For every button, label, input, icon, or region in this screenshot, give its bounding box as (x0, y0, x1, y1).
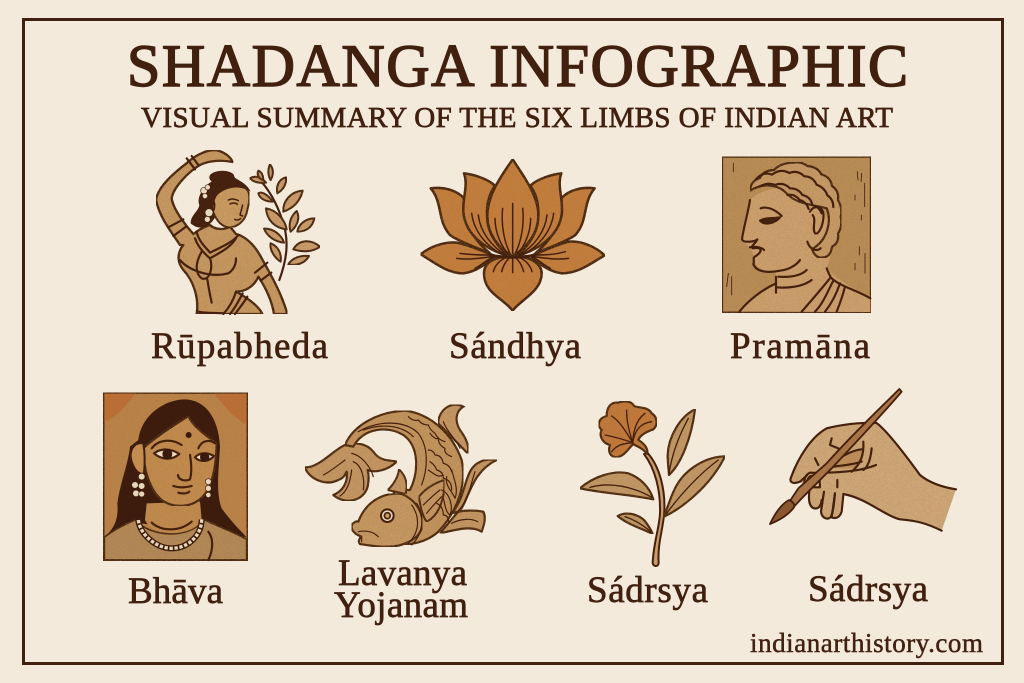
label line: Lavanya: Lavanya (338, 553, 467, 594)
dancer hair flowers (201, 185, 213, 222)
label: Sádrsya (hand): Sádrsya (808, 569, 928, 610)
portrait hair (750, 162, 841, 258)
flower lines and leaf veins (590, 410, 718, 533)
title: SHADANGA INFOGRAPHIC (127, 33, 908, 99)
hand shape (790, 423, 956, 531)
label: Sádrsya (flower): Sádrsya (587, 570, 708, 611)
fish top fin (438, 405, 468, 453)
woman garment (104, 520, 247, 560)
fish eye (381, 509, 394, 522)
fish pectoral fin (419, 480, 444, 522)
fish body (345, 411, 463, 545)
fish scales and lines (323, 417, 478, 545)
finger shading (832, 449, 862, 468)
fish tail fin (305, 443, 397, 501)
woman frame (103, 393, 248, 561)
subtitle: VISUAL SUMMARY OF THE SIX LIMBS OF INDIAN ART (141, 102, 893, 134)
frame corner shading (104, 394, 135, 422)
woman neck (145, 502, 202, 533)
icon: dancer with branch (156, 150, 320, 314)
branch leaves (250, 164, 320, 265)
label line: Yojanam: Yojanam (334, 585, 468, 626)
label: Pramāna: Pramāna (730, 326, 870, 367)
woman features (152, 441, 215, 560)
bindi (186, 432, 192, 438)
label: Bhāva: Bhāva (128, 571, 223, 612)
brush tip (770, 500, 794, 524)
woman necklace beads (138, 519, 202, 548)
label: Lavanya Yojanam (334, 553, 468, 626)
fish head (352, 494, 422, 547)
woman irises (162, 449, 209, 462)
dancer head (211, 183, 249, 227)
dancer necklaces (195, 232, 238, 303)
portrait lines (739, 171, 870, 312)
woman face (143, 416, 217, 506)
label: Rūpabheda: Rūpabheda (151, 326, 328, 367)
brush handle (788, 389, 902, 507)
sprig stem (644, 453, 664, 566)
dancer bangles and waist (168, 156, 271, 314)
fish dorsal fin on head (388, 469, 407, 494)
portrait bust (739, 188, 870, 312)
portrait frame (722, 157, 871, 313)
portrait background scratches (727, 163, 865, 295)
website credit: indianarthistory.com (750, 628, 983, 658)
woman ear (131, 443, 145, 474)
woman earrings (132, 473, 211, 498)
hand outline and finger lines (790, 423, 956, 531)
lotus veins (457, 203, 569, 273)
dancer body (156, 150, 287, 314)
branch stem (258, 178, 287, 280)
woman necklace (138, 519, 202, 548)
icon: flower sprig (580, 401, 725, 566)
frame corner shading right (215, 394, 247, 425)
dancer ear and face details (210, 199, 243, 220)
icon: profile portrait (722, 157, 871, 313)
icon: fish (305, 405, 497, 547)
dancer hair (191, 171, 251, 228)
flower head (599, 401, 657, 457)
icon: lotus (421, 159, 605, 311)
icon: woman portrait (103, 393, 248, 561)
label: Sándhya: Sándhya (449, 326, 581, 367)
fish rear fin (440, 460, 497, 533)
brush (770, 389, 902, 524)
woman hair back (105, 399, 247, 537)
icon: hand holding brush (770, 389, 956, 531)
sprig leaves (580, 409, 725, 534)
lotus outer petals (421, 159, 605, 311)
